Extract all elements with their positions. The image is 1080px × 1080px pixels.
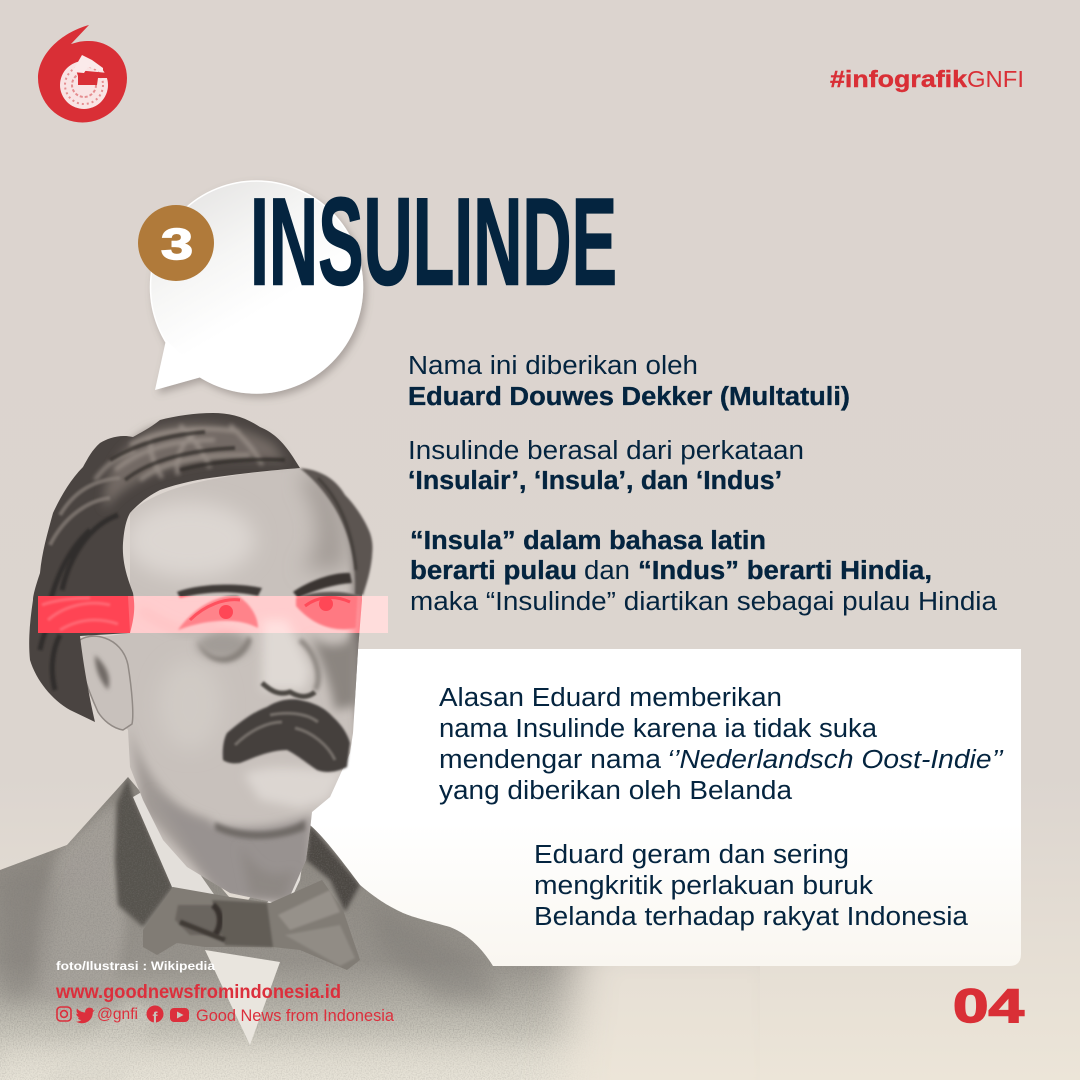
portrait hair <box>29 413 372 722</box>
text block: meaning: maka “Insulinde” diartikan sebagai pulau Hindia <box>410 588 998 616</box>
portrait ear <box>77 636 133 730</box>
portrait nose <box>262 640 318 696</box>
icon: speech bubble <box>150 181 362 393</box>
panel: white explanation card <box>300 649 1021 966</box>
text block: criticism: Belanda terhadap rakyat Indonesia <box>534 903 969 931</box>
hashtag heading: GNFI <box>967 66 1024 92</box>
page name: Good News from Indonesia <box>196 1006 395 1025</box>
text block: meaning: berarti pulau <box>410 557 577 585</box>
portrait shirt front <box>205 950 280 1045</box>
text block: reason: ‘’Nederlandsch Oost-Indie’’ <box>667 746 1003 774</box>
social links <box>57 1006 395 1026</box>
logo <box>38 25 127 122</box>
portrait bow tie <box>143 880 360 970</box>
number badge: 3 <box>161 220 193 269</box>
hashtag heading: #infografik <box>830 66 967 92</box>
photo credit: foto/Ilustrasi : Wikipedia <box>56 959 215 973</box>
icon: instagram <box>57 1007 71 1021</box>
text block: criticism: mengkritik perlakuan buruk <box>534 872 873 900</box>
portrait: Eduard Douwes Dekker <box>0 413 780 1080</box>
page number: 04 <box>953 979 1024 1032</box>
website url: www.goodnewsfromindonesia.id <box>55 982 341 1003</box>
red eye band <box>38 596 388 633</box>
text block: reason: yang diberikan oleh Belanda <box>439 777 793 805</box>
portrait eyebrows and eyes <box>38 573 358 633</box>
icon: facebook: f <box>152 1010 158 1026</box>
text block: word origin: Insulinde berasal dari perkataan <box>408 437 804 465</box>
handle: @gnfi <box>97 1006 138 1023</box>
text block: meaning: “Insula” dalam bahasa latin <box>410 527 766 555</box>
text block: criticism <box>534 841 969 931</box>
portrait coat <box>0 777 604 1080</box>
icon: youtube <box>170 1008 189 1022</box>
text block: reason <box>439 684 1003 805</box>
text block: criticism: Eduard geram dan sering <box>534 841 849 869</box>
text block: reason: nama Insulinde karena ia tidak suka <box>439 715 878 743</box>
text block: reason: mendengar nama <box>439 746 662 774</box>
portrait moustache <box>223 699 350 772</box>
icon: twitter <box>76 1008 95 1023</box>
text block: reason: Alasan Eduard memberikan <box>439 684 782 712</box>
icon: facebook <box>146 1006 164 1026</box>
number badge <box>138 205 214 281</box>
hashtag heading <box>830 66 1024 92</box>
portrait shirt collar <box>133 790 305 910</box>
text block: meaning <box>410 527 998 616</box>
text block: name origin: Eduard Douwes Dekker (Multatuli) <box>408 383 850 411</box>
text block: name origin: Nama ini diberikan oleh <box>408 352 698 380</box>
text block: word origin <box>408 437 804 495</box>
portrait face and neck <box>104 468 362 902</box>
title: INSULINDE <box>250 174 617 312</box>
text block: name origin <box>408 352 850 411</box>
text block: meaning: dan <box>584 557 630 585</box>
text block: word origin: ‘Insulair’, ‘Insula’, dan ‘Indus’ <box>408 467 782 495</box>
text block: meaning: “Indus” berarti Hindia, <box>638 557 932 585</box>
